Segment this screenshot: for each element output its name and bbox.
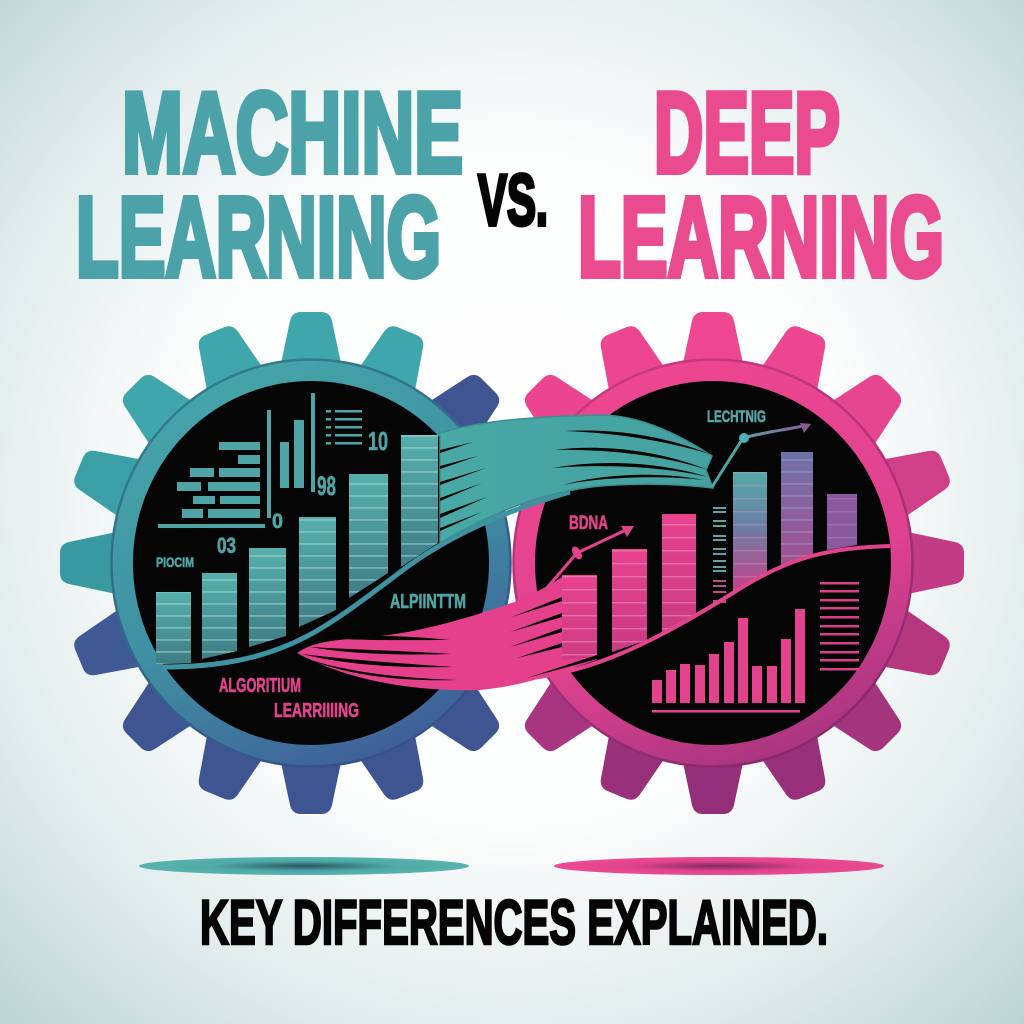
title: Deep Learning [578, 70, 944, 300]
curve: left divider [163, 492, 570, 667]
title: Machine Learning [76, 70, 463, 300]
right chart labels [569, 407, 766, 534]
left gear: machine learning [60, 312, 511, 814]
left chart labels: 98 [317, 471, 336, 501]
left legend list [326, 410, 362, 444]
left pink labels: LEARRIIIING [274, 700, 359, 722]
right gradient bars [733, 452, 857, 593]
right chart labels: BDNA [569, 513, 608, 534]
left pink labels: ALGORITIUM [219, 675, 301, 697]
left pink labels [219, 675, 359, 722]
pink ribbon slits [297, 597, 597, 680]
right lines list [820, 582, 859, 670]
title: Machine Learning: MACHINE [122, 70, 463, 197]
gear ring outer edge [514, 360, 912, 766]
left chart labels: 03 [217, 533, 236, 558]
left chart labels: PIOCIM [156, 554, 194, 570]
trend arrow: upper right [712, 423, 811, 487]
platform shadow: teal [139, 857, 469, 875]
right chart labels: LECHTNIG [707, 407, 766, 426]
left chart labels: 0 [272, 510, 283, 533]
title: Deep Learning: DEEP [654, 70, 840, 197]
left chart labels [156, 426, 466, 613]
right gear: deep learning [513, 312, 964, 814]
ribbon: pink from right gear to left gear [297, 577, 597, 690]
teal ribbon slits [440, 430, 710, 531]
title: vs.: VS. [478, 161, 548, 241]
left rising bars [156, 435, 438, 664]
left chart labels: 10 [368, 426, 388, 456]
curve: right divider [530, 546, 890, 678]
gear teeth pink [513, 312, 964, 814]
right tick list [713, 507, 726, 603]
ribbon: teal from left gear to right gear [440, 415, 713, 543]
left small column chart [280, 393, 315, 492]
left chart labels: ALPIINTTM [390, 591, 466, 613]
gear ring teal [122, 370, 500, 756]
trend arrow: pink [545, 526, 634, 590]
right lower column chart [652, 609, 805, 712]
platform shadow: pink [554, 857, 884, 875]
left horizontal bar chart [158, 410, 271, 528]
title: Machine Learning: LEARNING [76, 174, 441, 300]
gear ring pink [524, 370, 902, 756]
gear ring outer edge [112, 360, 510, 766]
right rising pink bars [562, 514, 696, 672]
gear teeth teal [60, 312, 511, 814]
